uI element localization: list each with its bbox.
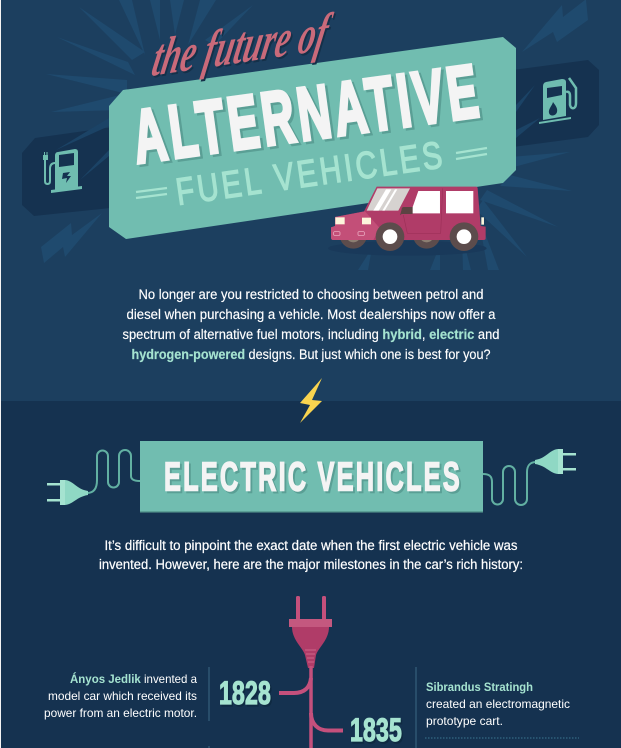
timeline plug	[289, 596, 332, 668]
year 1835: 1835	[350, 712, 402, 748]
title: fuel vehicles: FUEL VEHICLES	[173, 134, 445, 214]
left plug and cable	[47, 450, 140, 505]
title side dashes	[136, 148, 487, 198]
faint rays over bands	[56, 85, 540, 180]
milestone text: 1835: Sibrandus Stratingh	[426, 680, 533, 694]
milestone text: 1828: model car which received its	[48, 689, 197, 703]
icon: electric charging pump	[43, 149, 82, 193]
year 1828: 1828	[220, 677, 272, 713]
timeline separators	[209, 667, 416, 748]
background sunburst rays	[46, 0, 572, 270]
icon: yellow lightning bolt	[300, 378, 322, 423]
section banner: electric vehicles: ELECTRIC VEHICLES	[166, 456, 462, 502]
background lightning bolt left	[41, 213, 102, 263]
section intro text: It’s difficult to pinpoint the exact date when the first electric vehicle was	[104, 538, 518, 553]
icon: gas pump with flame	[539, 78, 576, 124]
dotted divider	[425, 737, 579, 739]
milestone text: 1828: power from an electric motor.	[44, 706, 197, 720]
title banner	[109, 37, 516, 239]
car illustration	[328, 187, 487, 256]
intro text: diesel when purchasing a vehicle. Most dealerships now offer a	[126, 307, 496, 322]
title: alternative: ALTERNATIVE	[131, 52, 486, 182]
intro text: No longer are you restricted to choosing between petrol and	[138, 287, 484, 302]
title: the future of	[147, 1, 339, 90]
intro text	[122, 287, 500, 362]
section banner: electric vehicles: ELECTRIC VEHICLES	[164, 454, 460, 500]
intro text: spectrum of alternative fuel motors, including hybrid, electric and	[122, 327, 500, 342]
milestone text: 1835: prototype cart.	[426, 714, 503, 728]
background lightning bolt right	[522, 0, 588, 52]
milestone text: 1835	[426, 680, 570, 728]
timeline cable and branches	[279, 666, 343, 748]
left ribbon band	[22, 126, 120, 216]
milestone text: 1828	[44, 671, 197, 720]
section banner: electric vehicles	[140, 441, 483, 512]
title: alternative: ALTERNATIVE	[128, 50, 483, 180]
right ribbon band	[505, 60, 599, 148]
right plug and cable	[483, 449, 576, 505]
section intro text: invented. However, here are the major milestones in the car’s rich history:	[99, 557, 523, 572]
intro text: hydrogen-powered designs. But just which one is best for you?	[132, 347, 490, 362]
milestone text: 1835: created an electromagnetic	[426, 697, 570, 711]
year 1828: 1828	[219, 675, 271, 711]
section intro text	[99, 538, 523, 572]
milestone text: 1828: Ányos Jedlik invented a	[70, 671, 197, 686]
